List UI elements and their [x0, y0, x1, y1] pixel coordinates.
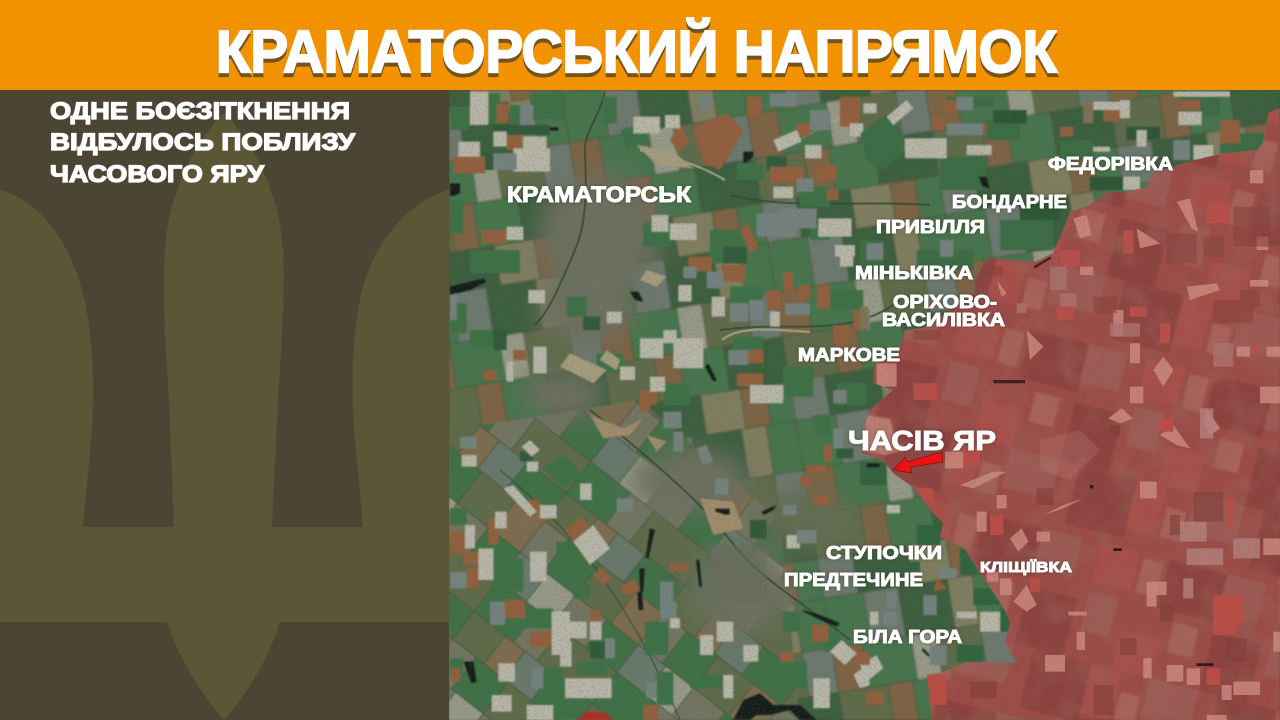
label: Klishchiivka: КЛІЩІЇВКА: [980, 559, 1072, 576]
header bar: [0, 0, 1280, 90]
label: Kramatorsk: КРАМАТОРСЬК: [507, 182, 692, 207]
map labels: [507, 154, 1173, 647]
label: Bila Hora: БІЛА ГОРА: [853, 627, 962, 647]
red zone base patchwork: [840, 90, 1280, 720]
summary line 3: ЧАСОВОГО ЯРУ: [50, 161, 265, 188]
label: Stupochky: СТУПОЧКИ: [826, 543, 942, 563]
summary line 2: ВІДБУЛОСЬ ПОБЛИЗУ: [50, 129, 356, 156]
rivers and tree lines: [500, 92, 930, 720]
map base patchwork: south-west: [449, 400, 800, 720]
label: Orikhovo-Vasylivka: ВАСИЛІВКА: [882, 310, 1005, 330]
label: Predtechyne: ПРЕДТЕЧИНЕ: [784, 570, 923, 590]
farm fields: [450, 92, 1263, 720]
south green strip fields: [860, 462, 1012, 705]
label: Markove: МАРКОВЕ: [798, 345, 900, 365]
label: Minkivka: МІНЬКІВКА: [855, 263, 973, 283]
red zone fields: south: [913, 408, 1280, 720]
north-west quadrant fields: [450, 92, 870, 405]
label: Orikhovo-Vasylivka: [882, 292, 1005, 330]
grain on red zone: [840, 90, 1280, 720]
muted tone over green area: [449, 90, 1280, 720]
red zone fields: north: [876, 170, 1280, 404]
urban and bare ground tones: [525, 173, 860, 634]
label: Fedorivka: ФЕДОРІВКА: [1048, 154, 1173, 174]
fine image grain: [449, 90, 1280, 720]
label: Bondarne: БОНДАРНЕ: [952, 192, 1067, 212]
title: КРАМАТОРСЬКИЙ НАПРЯМОК: [216, 18, 1058, 85]
arrow: pointing to Chasiv Yar: [893, 452, 943, 473]
Chasiv Yar town pale area: [864, 415, 1100, 480]
map: satellite imagery: [449, 90, 1280, 720]
north-east green fields: [860, 92, 1263, 330]
map base patchwork: north: [449, 90, 1280, 720]
panel: left background: [0, 90, 449, 720]
south-west quadrant fields: [450, 405, 870, 720]
label: Chasiv Yar: ЧАСІВ ЯР: [848, 425, 996, 456]
red zone mottling: [840, 90, 1280, 720]
summary line 1: ОДНЕ БОЄЗІТКНЕННЯ: [50, 98, 350, 125]
occupied territory: red overlay: [840, 90, 1280, 720]
pale ravine banks: [640, 110, 860, 340]
label: Orikhovo-Vasylivka: ОРІХОВО-: [893, 292, 997, 312]
label: Pryvillia: ПРИВІЛЛЯ: [876, 217, 985, 237]
text block: summary: [50, 98, 356, 188]
emblem: trident watermark: [0, 113, 449, 720]
